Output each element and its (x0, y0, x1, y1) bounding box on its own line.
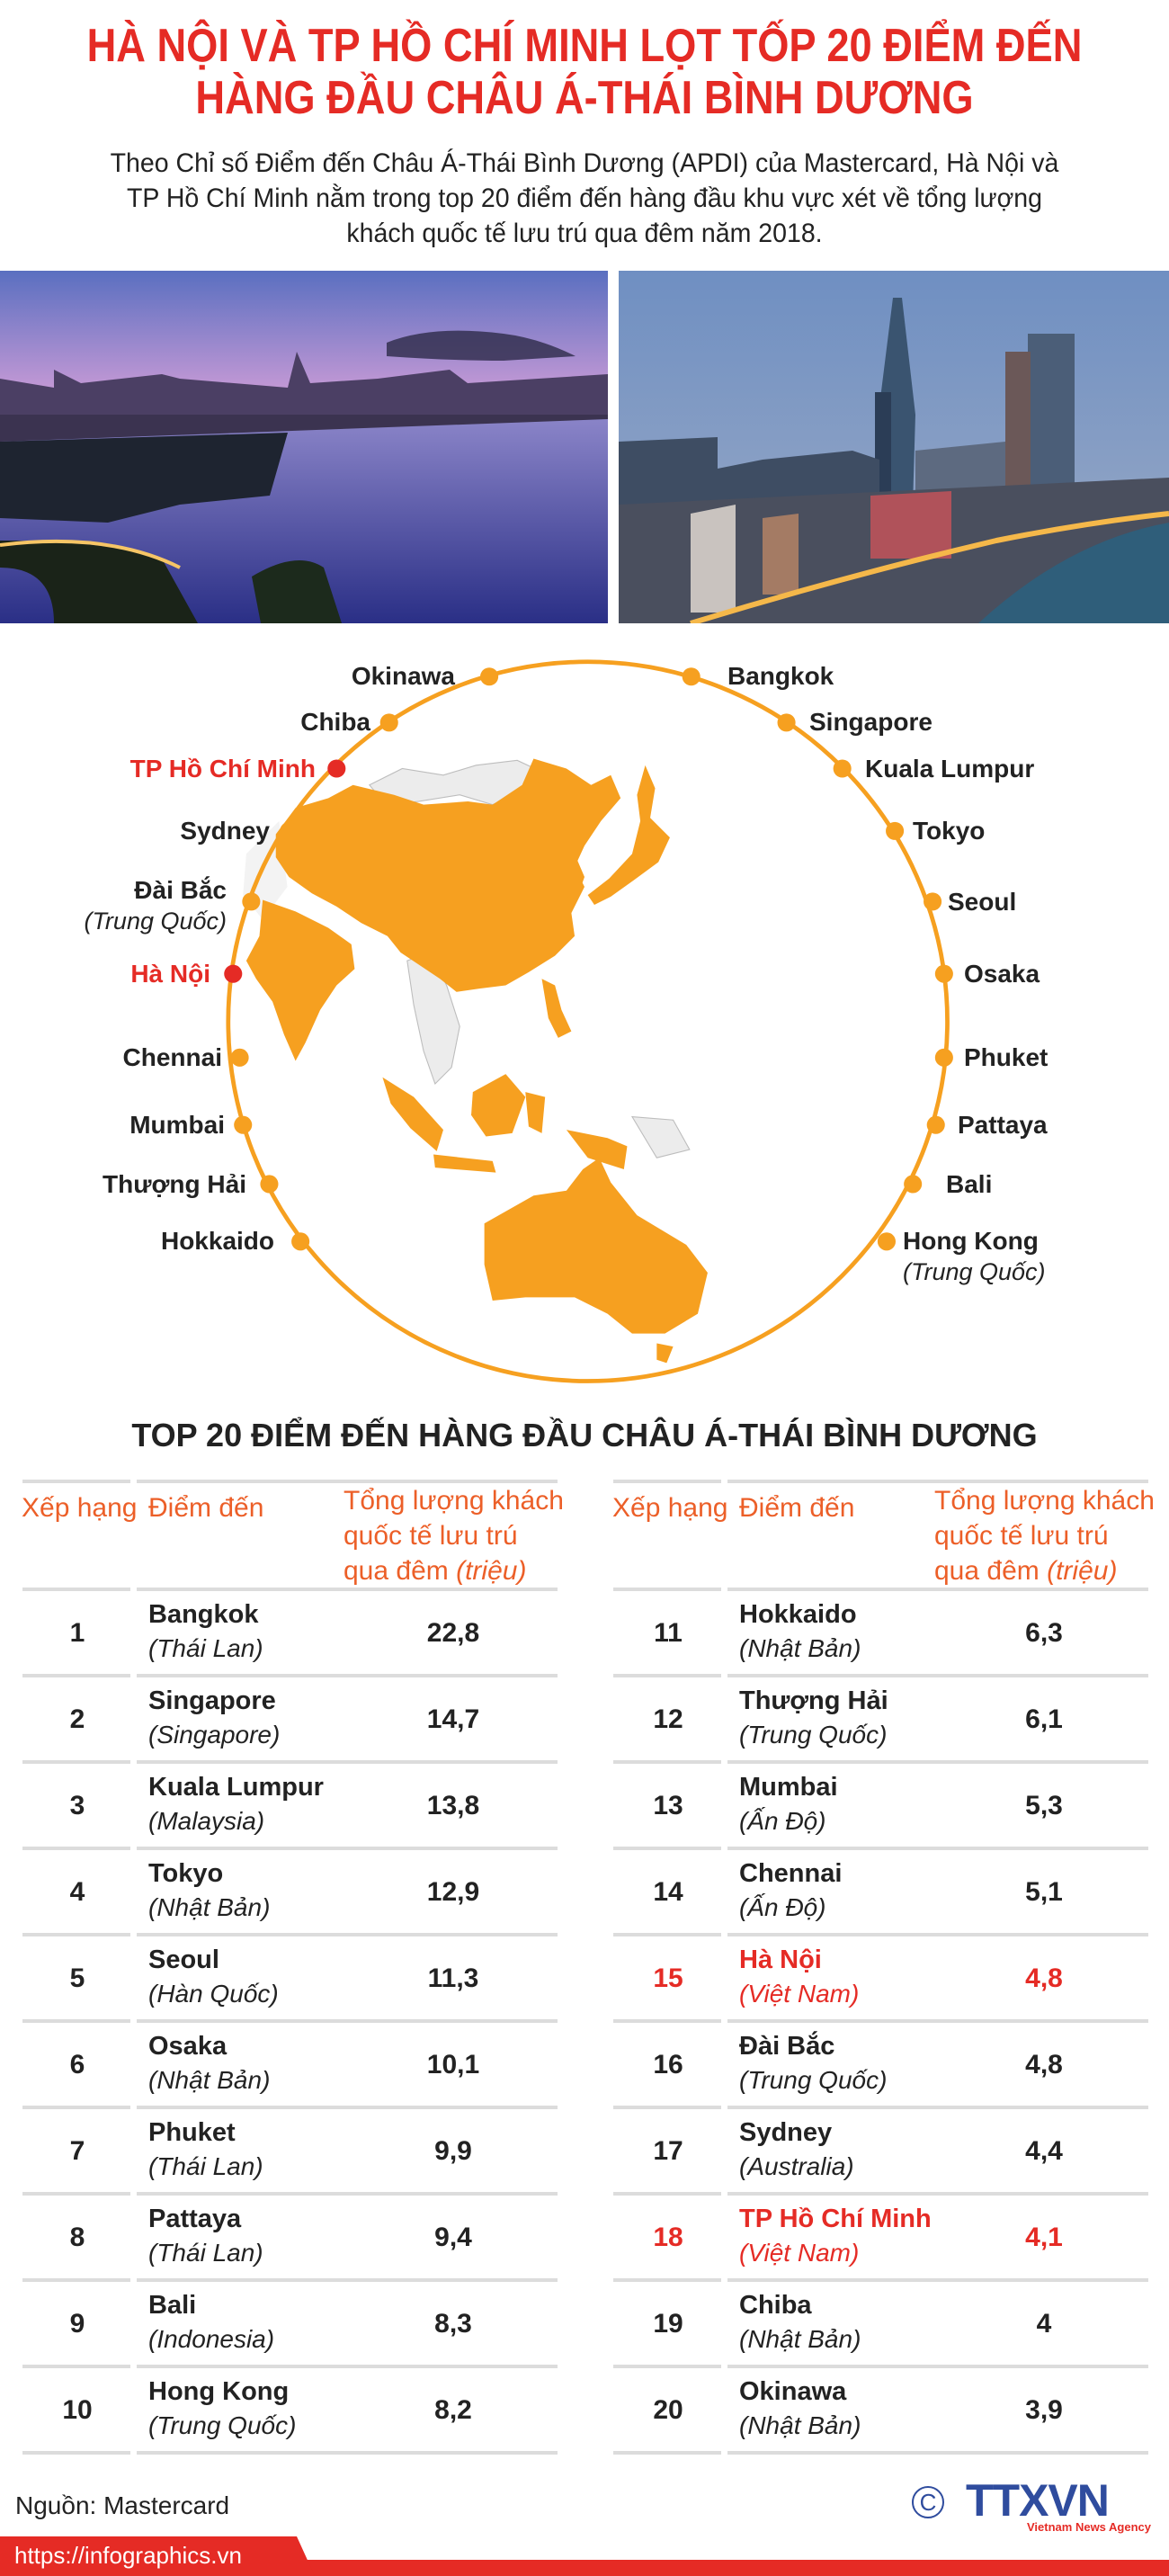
table right: ranks 11-20: 6,3 (1025, 1618, 1063, 1648)
map labels: Okinawa (352, 662, 455, 690)
table left: ranks 1-10: (Nhật Bản) (148, 1893, 270, 1921)
map labels: Bali (946, 1170, 992, 1198)
table right: ranks 11-20: 14 (653, 1877, 683, 1907)
table right: ranks 11-20: 13 (653, 1791, 683, 1820)
title: HÀ NỘI VÀ TP HỒ CHÍ MINH LỌT TỐP 20 ĐIỂM ĐẾN (87, 20, 1082, 72)
table right: ranks 11-20: 16 (653, 2050, 683, 2080)
table left: ranks 1-10: 7 (70, 2136, 85, 2166)
table right: ranks 11-20: 15 (653, 1963, 683, 1993)
table left: ranks 1-10: 5 (70, 1963, 85, 1993)
map labels: (Trung Quốc) (84, 908, 227, 935)
table left: ranks 1-10: Bangkok (148, 1600, 258, 1629)
table left: ranks 1-10: (Hàn Quốc) (148, 1980, 279, 2008)
map: grey neighbours (243, 760, 690, 1158)
map labels: Chennai (123, 1043, 222, 1071)
table right: ranks 11-20: Chennai (739, 1859, 842, 1888)
table left: ranks 1-10: Tổng lượng khách (344, 1486, 564, 1516)
table right: ranks 11-20 (612, 1480, 1155, 2455)
circle ring (228, 662, 948, 1382)
table left: ranks 1-10: qua đêm (triệu) (344, 1556, 526, 1586)
table right: ranks 11-20: 12 (653, 1704, 683, 1734)
table left: ranks 1-10: 9,4 (434, 2223, 472, 2252)
title (87, 19, 1082, 124)
table left: ranks 1-10: 2 (70, 1704, 85, 1734)
table left: ranks 1-10: (Nhật Bản) (148, 2066, 270, 2094)
photo: Ho Chi Minh City skyline (619, 271, 1169, 623)
table heading: TOP 20 ĐIỂM ĐẾN HÀNG ĐẦU CHÂU Á-THÁI BÌNH DƯƠNG (131, 1417, 1038, 1453)
table right: ranks 11-20: 5,3 (1025, 1791, 1063, 1820)
table right: ranks 11-20: Chiba (739, 2291, 812, 2320)
table left: ranks 1-10: 10,1 (427, 2050, 479, 2080)
footer band with url (0, 2536, 1169, 2576)
table right: ranks 11-20: (Việt Nam) (739, 2239, 859, 2267)
table left: ranks 1-10: Xếp hạng (22, 1493, 137, 1523)
table right: ranks 11-20: 6,1 (1025, 1704, 1063, 1734)
table left: ranks 1-10: Hong Kong (148, 2377, 289, 2406)
table left: ranks 1-10: 9 (70, 2309, 85, 2339)
table left: ranks 1-10: 3 (70, 1791, 85, 1820)
table right: ranks 11-20: 18 (653, 2223, 683, 2252)
map labels: Bangkok (727, 662, 834, 690)
table right: ranks 11-20: Tổng lượng khách (934, 1486, 1155, 1516)
table right: ranks 11-20: qua đêm (triệu) (934, 1556, 1117, 1586)
table left: ranks 1-10: 4 (70, 1877, 85, 1907)
map labels: Đài Bắc (134, 876, 227, 904)
table left: ranks 1-10: 14,7 (427, 1704, 479, 1734)
table left: ranks 1-10: (Thái Lan) (148, 1634, 263, 1662)
table left: ranks 1-10: 12,9 (427, 1877, 479, 1907)
table left: ranks 1-10: Điểm đến (148, 1493, 263, 1523)
table right: ranks 11-20: (Trung Quốc) (739, 1721, 887, 1749)
table right: ranks 11-20: Hà Nội (739, 1945, 822, 1974)
map labels: Chiba (300, 708, 370, 736)
table right: ranks 11-20: Mumbai (739, 1773, 838, 1802)
table left: ranks 1-10: Singapore (148, 1686, 276, 1715)
table right: ranks 11-20: (Trung Quốc) (739, 2066, 887, 2094)
table left: ranks 1-10: 13,8 (427, 1791, 479, 1820)
intro text: khách quốc tế lưu trú qua đêm năm 2018. (346, 219, 823, 248)
table left: ranks 1-10: Seoul (148, 1945, 219, 1974)
table right: ranks 11-20: (Australia) (739, 2152, 854, 2180)
map labels: Thượng Hải (103, 1170, 246, 1198)
table right: ranks 11-20: quốc tế lưu trú (934, 1521, 1109, 1551)
table right: ranks 11-20: 17 (653, 2136, 683, 2166)
table right: ranks 11-20: 4,8 (1025, 2050, 1063, 2080)
source note: Nguồn: Mastercard (15, 2491, 229, 2519)
map labels: TP Hồ Chí Minh (130, 755, 316, 783)
table left: ranks 1-10: 8,3 (434, 2309, 472, 2339)
table right: ranks 11-20: 4,4 (1025, 2136, 1063, 2166)
map labels: Tokyo (913, 817, 985, 845)
map labels: Hà Nội (130, 960, 210, 988)
table left: ranks 1-10 (22, 1480, 564, 2455)
map labels: Mumbai (129, 1111, 225, 1139)
table right: ranks 11-20: 3,9 (1025, 2395, 1063, 2425)
logo TTXVN: TTXVN (966, 2475, 1109, 2526)
table right: ranks 11-20: (Nhật Bản) (739, 2411, 861, 2439)
table right: ranks 11-20: (Nhật Bản) (739, 2325, 861, 2353)
map labels (84, 662, 1048, 1285)
map: orange countries (246, 759, 708, 1363)
table right: ranks 11-20: 4,1 (1025, 2223, 1063, 2252)
intro text (111, 148, 1059, 248)
table left: ranks 1-10: 11,3 (428, 1963, 478, 1993)
intro text: TP Hồ Chí Minh nằm trong top 20 điểm đến hàng đầu khu vực xét về tổng lượng (127, 183, 1042, 213)
table left: ranks 1-10: (Trung Quốc) (148, 2411, 296, 2439)
table right: ranks 11-20: Điểm đến (739, 1493, 854, 1523)
map labels: Singapore (809, 708, 933, 736)
map labels: Osaka (964, 960, 1040, 988)
table right: ranks 11-20: Thượng Hải (739, 1686, 888, 1715)
table right: ranks 11-20: TP Hồ Chí Minh (739, 2205, 932, 2233)
map labels: Pattaya (958, 1111, 1048, 1139)
dots (231, 667, 953, 1250)
table right: ranks 11-20: 4 (1037, 2309, 1051, 2339)
logo TTXVN: Vietnam News Agency (1027, 2520, 1151, 2534)
table left: ranks 1-10: Phuket (148, 2118, 236, 2147)
footer band with url: https://infographics.vn (14, 2542, 242, 2569)
table right: ranks 11-20: (Ấn Độ) (739, 1893, 825, 1921)
intro text: Theo Chỉ số Điểm đến Châu Á-Thái Bình Dương (APDI) của Mastercard, Hà Nội và (111, 148, 1058, 178)
map with circle of destinations (224, 659, 953, 1383)
photo: Hanoi lake at dusk (0, 271, 608, 623)
map labels: (Trung Quốc) (903, 1258, 1046, 1285)
table left: ranks 1-10: Kuala Lumpur (148, 1773, 324, 1802)
table right: ranks 11-20: (Việt Nam) (739, 1980, 859, 2008)
map labels: Kuala Lumpur (865, 755, 1034, 783)
logo TTXVN: C (920, 2489, 936, 2516)
table right: ranks 11-20: (Ấn Độ) (739, 1807, 825, 1835)
table right: ranks 11-20: Sydney (739, 2118, 832, 2147)
table left: ranks 1-10: Bali (148, 2291, 196, 2320)
table right: ranks 11-20: Okinawa (739, 2377, 846, 2406)
table left: ranks 1-10: 8,2 (434, 2395, 472, 2425)
table left: ranks 1-10: Osaka (148, 2032, 227, 2061)
table left: ranks 1-10: 9,9 (434, 2136, 472, 2166)
map labels: Hokkaido (161, 1227, 274, 1255)
table left: ranks 1-10: (Indonesia) (148, 2325, 274, 2353)
map labels: Sydney (180, 817, 270, 845)
map labels: Phuket (964, 1043, 1048, 1071)
table left: ranks 1-10: Pattaya (148, 2205, 241, 2233)
title: HÀNG ĐẦU CHÂU Á-THÁI BÌNH DƯƠNG (195, 72, 974, 124)
table right: ranks 11-20: (Nhật Bản) (739, 1634, 861, 1662)
table left: ranks 1-10: (Malaysia) (148, 1807, 264, 1835)
table left: ranks 1-10: 6 (70, 2050, 85, 2080)
table right: ranks 11-20: 5,1 (1025, 1877, 1063, 1907)
logo TTXVN (912, 2475, 1151, 2534)
table right: ranks 11-20: Hokkaido (739, 1600, 857, 1629)
table right: ranks 11-20: Xếp hạng (612, 1493, 727, 1523)
table right: ranks 11-20: 20 (653, 2395, 683, 2425)
table left: ranks 1-10: quốc tế lưu trú (344, 1521, 518, 1551)
table right: ranks 11-20: 19 (653, 2309, 683, 2339)
table right: ranks 11-20: 11 (654, 1618, 683, 1648)
table left: ranks 1-10: 8 (70, 2223, 85, 2252)
table left: ranks 1-10: 22,8 (427, 1618, 479, 1648)
table right: ranks 11-20: 4,8 (1025, 1963, 1063, 1993)
map labels: Hong Kong (903, 1227, 1039, 1255)
table left: ranks 1-10: (Thái Lan) (148, 2239, 263, 2267)
table left: ranks 1-10: (Thái Lan) (148, 2152, 263, 2180)
table left: ranks 1-10: Tokyo (148, 1859, 223, 1888)
table right: ranks 11-20: Đài Bắc (739, 2032, 834, 2061)
table left: ranks 1-10: (Singapore) (148, 1721, 280, 1749)
table left: ranks 1-10: 10 (62, 2395, 93, 2425)
table left: ranks 1-10: 1 (70, 1618, 85, 1648)
map labels: Seoul (948, 888, 1016, 916)
